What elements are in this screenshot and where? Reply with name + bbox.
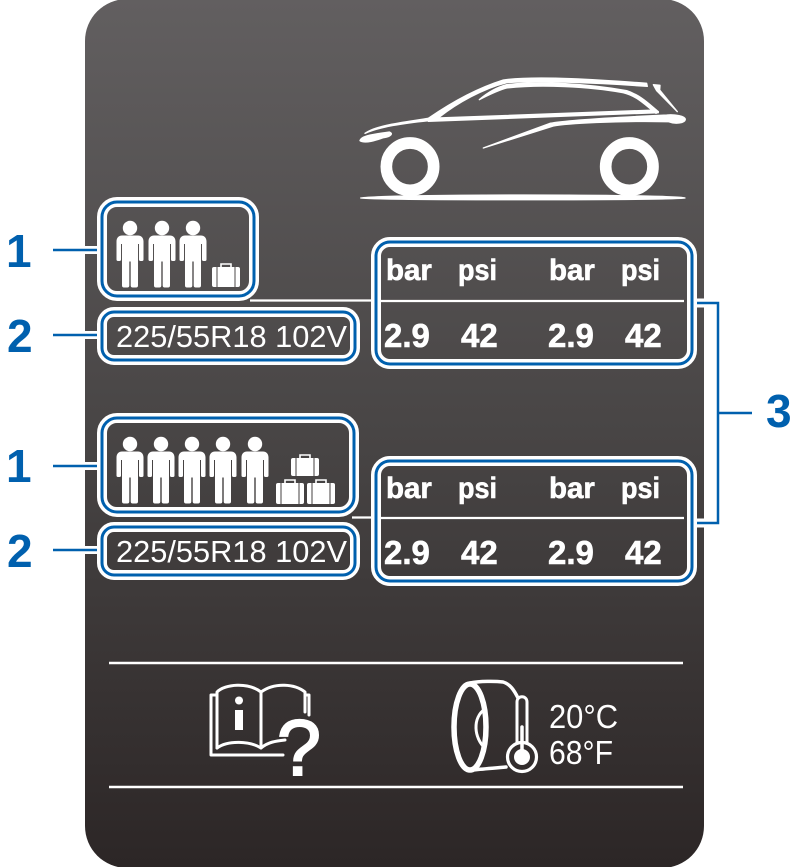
column headers bbox=[386, 254, 660, 287]
pressure values: 2.9 bbox=[548, 534, 594, 571]
tyre size text: 225/55R18 102V bbox=[116, 534, 347, 569]
icon: manual with question mark bbox=[211, 685, 321, 792]
icon: car side view bbox=[360, 78, 685, 200]
pressure values: 2.9 bbox=[548, 317, 594, 354]
pressure values: 42 bbox=[461, 534, 498, 571]
column headers: psi bbox=[621, 254, 660, 287]
footer rule, top bbox=[109, 662, 683, 664]
tyre size text: 225/55R18 102V bbox=[116, 319, 347, 354]
column headers: bar bbox=[386, 472, 432, 505]
question mark: ? bbox=[277, 703, 321, 792]
column headers: bar bbox=[549, 254, 595, 287]
pressure values: 42 bbox=[625, 317, 662, 354]
pressure values: 42 bbox=[461, 317, 498, 354]
column headers: psi bbox=[458, 472, 497, 505]
load box: 3 people and 1 case bbox=[102, 202, 254, 296]
pressure values: 2.9 bbox=[384, 534, 430, 571]
panel: tyre label background bbox=[85, 0, 704, 867]
column headers bbox=[386, 472, 660, 505]
pressure table, lower bbox=[376, 461, 692, 581]
number 1 lower: 1 bbox=[6, 440, 32, 492]
connector line from upper load box bbox=[250, 299, 372, 302]
tyre size box, upper bbox=[102, 312, 355, 360]
temperature celsius: 20°C bbox=[549, 698, 618, 735]
load box: 5 people and 3 cases bbox=[102, 418, 354, 512]
pressure values: 2.9 bbox=[384, 317, 430, 354]
icon: suitcases bbox=[276, 455, 335, 504]
temperature fahrenheit: 68°F bbox=[549, 734, 613, 771]
tyre size box, lower bbox=[102, 527, 355, 575]
number 3: 3 bbox=[766, 385, 792, 437]
icon: people bbox=[116, 221, 206, 288]
column headers: bar bbox=[549, 472, 595, 505]
number 2 upper: 2 bbox=[7, 310, 33, 362]
callout 1 leader, lower bbox=[53, 462, 100, 470]
icon: people bbox=[116, 437, 268, 504]
icon: suitcase bbox=[212, 264, 240, 287]
column headers: psi bbox=[458, 254, 497, 287]
pressure values bbox=[384, 317, 662, 354]
callout 2 leader, upper bbox=[53, 331, 100, 339]
pressure table, upper bbox=[376, 242, 692, 364]
bracket linking tables to number 3 bbox=[690, 303, 752, 523]
callout 2 leader, lower bbox=[53, 546, 100, 554]
column headers: bar bbox=[386, 254, 432, 287]
number 2 lower: 2 bbox=[7, 525, 33, 577]
column headers: psi bbox=[621, 472, 660, 505]
footer rule, bottom bbox=[109, 786, 683, 788]
connector line from lower load box bbox=[352, 516, 372, 519]
pressure values bbox=[384, 534, 662, 571]
pressure values: 42 bbox=[625, 534, 662, 571]
icon: tyre with thermometer bbox=[454, 681, 536, 772]
callout 1 leader, upper bbox=[53, 246, 100, 254]
number 1 upper: 1 bbox=[6, 225, 32, 277]
